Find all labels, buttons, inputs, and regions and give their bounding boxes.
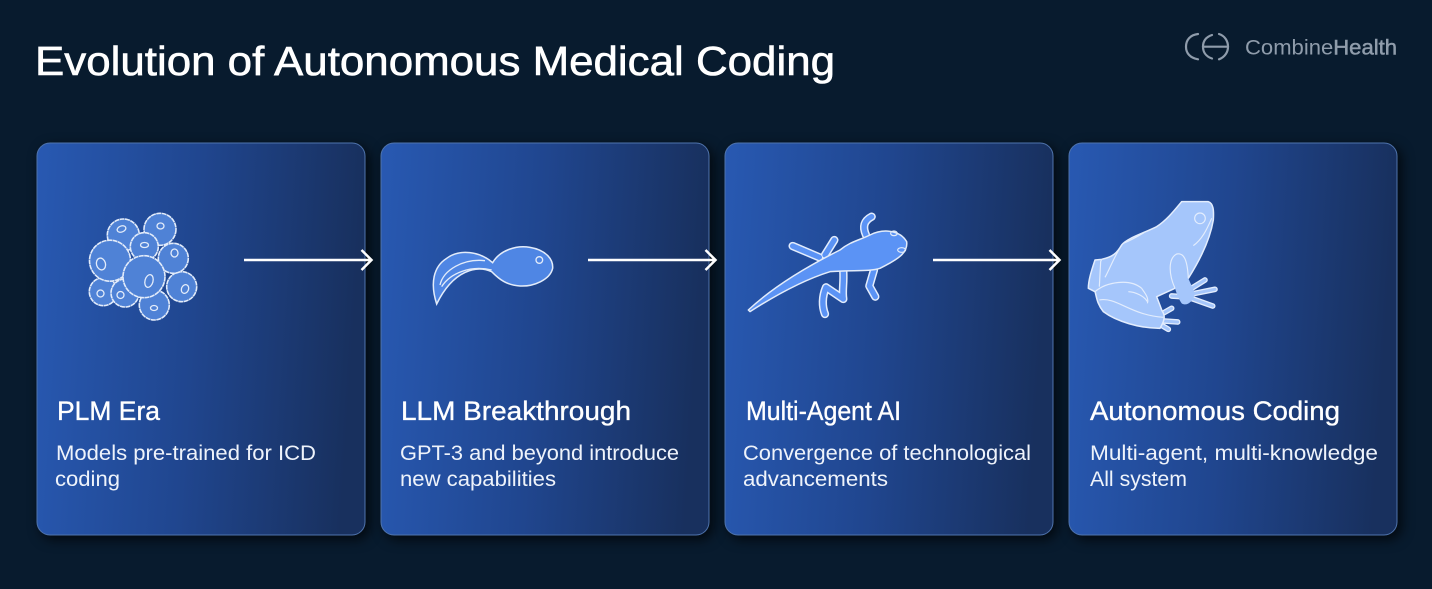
description: [400, 441, 679, 491]
icon: tadpole with legs: [748, 217, 907, 314]
heading: Multi-Agent AI: [746, 396, 901, 426]
arrow: [933, 250, 1060, 270]
icon: egg cluster: [89, 213, 197, 320]
description: Models pre-trained for ICD: [56, 441, 316, 465]
description: Multi-agent, multi-knowledge: [1090, 441, 1378, 465]
description: All system: [1090, 467, 1187, 491]
panel: Multi-Agent AI: [725, 143, 1060, 535]
icon: logo mark: [1186, 34, 1228, 59]
heading: LLM Breakthrough: [401, 396, 631, 426]
title: Evolution of Autonomous Medical Coding: [35, 38, 835, 84]
card background: [37, 143, 365, 535]
card background: [381, 143, 709, 535]
description: coding: [55, 467, 120, 491]
arrow: [244, 250, 372, 270]
description: [743, 441, 1031, 491]
arrow: [588, 250, 716, 270]
icon: tadpole: [433, 247, 553, 304]
description: GPT-3 and beyond introduce: [400, 441, 679, 465]
description: new capabilities: [400, 467, 556, 491]
heading: PLM Era: [57, 396, 161, 426]
description: [55, 441, 316, 491]
logo wordmark: CombineHealth: [1245, 36, 1397, 60]
logo: CombineHealth: [1186, 34, 1397, 60]
panel: Autonomous Coding: [1069, 143, 1397, 535]
card background: [725, 143, 1053, 535]
card background: [1069, 143, 1397, 535]
panel: LLM Breakthrough: [381, 143, 716, 535]
icon: frog: [1088, 202, 1215, 329]
description: advancements: [743, 467, 888, 491]
panel: PLM Era: [37, 143, 372, 535]
description: [1090, 441, 1378, 491]
heading: Autonomous Coding: [1090, 396, 1340, 426]
description: Convergence of technological: [743, 441, 1031, 465]
